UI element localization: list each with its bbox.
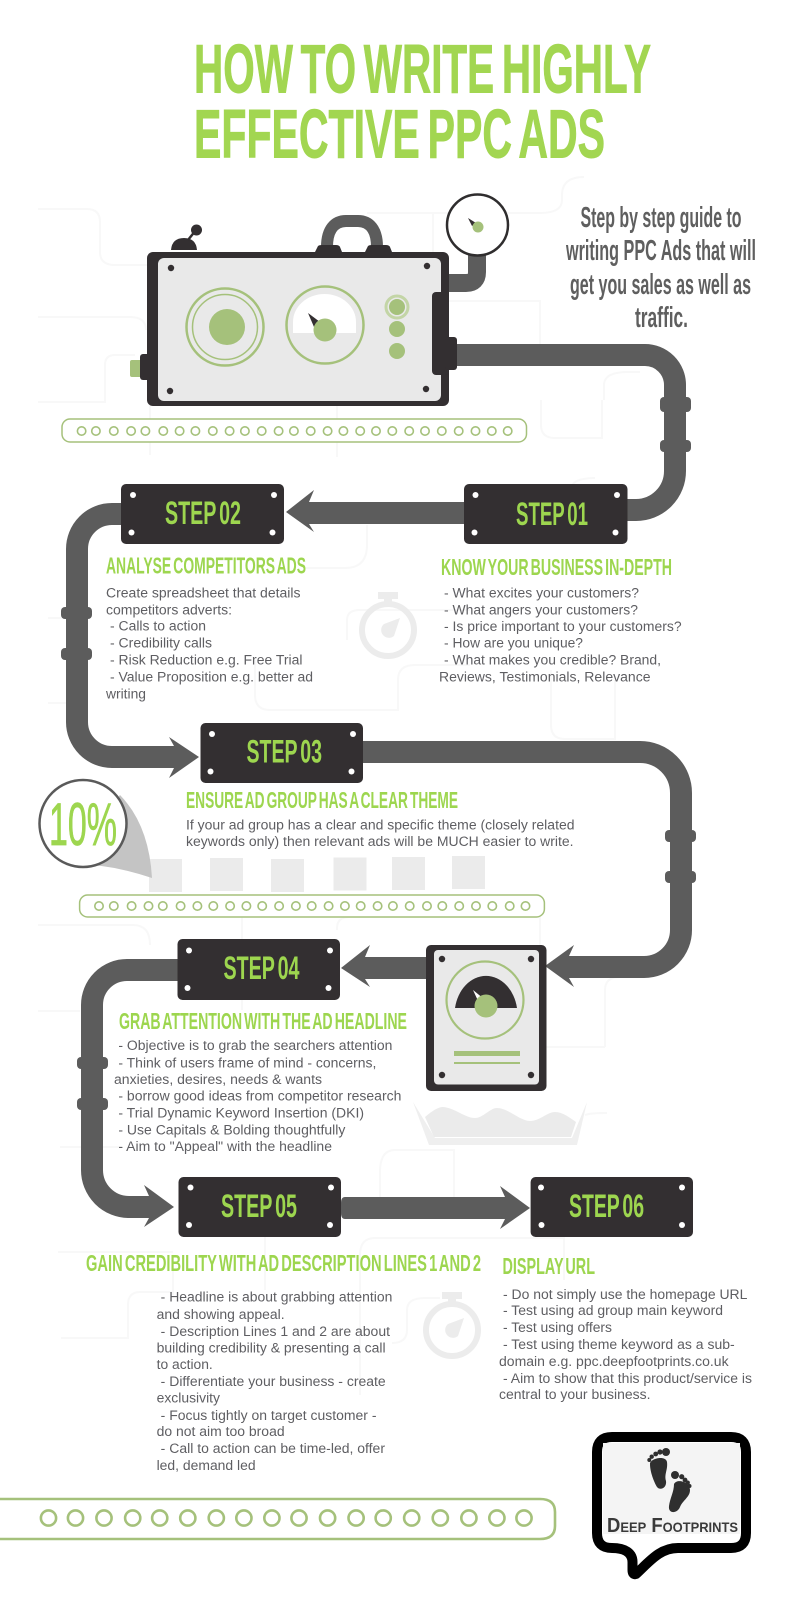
side knob [130,360,142,377]
step 02 text [105,585,313,701]
step 03 text: If your ad group has a clear and specific theme (closely related [186,818,574,832]
logo: Deep Footprints [597,1437,746,1574]
step 06 text [499,1287,752,1402]
indicator lights [386,296,408,359]
step 02 plate: STEP 02 [165,495,241,531]
step 01 text: - What excites your customers? [444,585,639,600]
step 03 plate [200,723,363,783]
step 05 text: - Description Lines 1 and 2 are about [161,1324,390,1339]
step 06 text: central to your business. [499,1387,650,1402]
step 05 text: led, demand led [157,1458,256,1473]
pipe: step 02 to step 03 [77,514,178,757]
pipe: step 03 to meter [363,752,681,967]
step 05 text: and showing appeal. [157,1307,285,1322]
step 05 plate [178,1177,341,1237]
title [194,30,651,172]
conveyor one [62,419,526,442]
step 03 plate: STEP 03 [246,734,322,770]
step 06 text: domain e.g. ppc.deepfootprints.co.uk [499,1354,729,1369]
icon: faint bowl [413,1102,587,1145]
step 02 text: - Value Proposition e.g. better ad [110,669,313,684]
step 06 plate: STEP 06 [569,1188,644,1224]
arrow: step 05 to step 06 [341,1186,530,1229]
arrow head and joints: step 03 entry [61,607,199,778]
step 05 text [157,1290,392,1473]
step 01 text: - What makes you credible? Brand, [444,652,661,667]
concentric dial [186,288,264,366]
meter panel [426,945,546,1091]
logo: Deep Footprints: Deep Footprints [607,1515,738,1537]
pipe: machine to step 01 [457,355,675,510]
step 04 text: - Objective is to grab the searchers attention [118,1038,392,1053]
machine illustration [130,194,508,406]
step 03 text: keywords only) then relevant ads will be MUCH easier to write. [186,834,574,849]
handle [315,221,392,252]
step 02 text: - Calls to action [110,619,206,634]
step 05 text: - Differentiate your business - create [161,1374,386,1389]
arrow: meter to step 04 [341,945,426,987]
10 percent callout [40,780,152,878]
conveyor three [0,1499,555,1539]
step 03 heading: ENSURE AD GROUP HAS A CLEAR THEME [186,787,458,813]
step 06 text: - Aim to show that this product/service is [503,1371,752,1386]
step 01 text: - Is price important to your customers? [444,619,682,634]
step 04 text: - Think of users frame of mind - concerns, [118,1055,376,1070]
step 03 text [186,818,574,849]
step 04 plate: STEP 04 [224,950,300,986]
panel screws [167,263,430,394]
step 06 text: - Do not simply use the homepage URL [503,1287,748,1302]
lever [171,224,202,250]
step 01 plate: STEP 01 [516,496,588,532]
step 01 text: Reviews, Testimonials, Relevance [439,669,650,684]
step 06 text: - Test using ad group main keyword [503,1303,723,1318]
10 percent callout: 10% [49,791,117,858]
subtitle text: traffic. [635,302,688,334]
step 04 plate [178,939,340,1000]
step 05 plate: STEP 05 [221,1188,297,1224]
arrow: step 01 to step 02 [286,490,464,532]
arrow head and joints: meter entry [545,830,696,987]
step 04 text: anxieties, desires, needs & wants [114,1072,322,1087]
step 01 text [439,585,682,684]
step 05 text: to action. [157,1357,213,1372]
step 05 text: - Headline is about grabbing attention [161,1290,392,1305]
step 06 heading: DISPLAY URL [502,1253,595,1279]
step 05 text: - Focus tightly on target customer - [161,1408,376,1423]
step 04 text: - borrow good ideas from competitor research [118,1089,401,1104]
step 06 plate [531,1177,693,1237]
step 05 text: - Call to action can be time-led, offer [161,1441,386,1456]
step 05 text: do not aim too broad [157,1424,285,1439]
step 04 text: - Trial Dynamic Keyword Insertion (DKI) [118,1105,364,1120]
step 02 text: Create spreadsheet that details [106,585,301,600]
step 06 text: - Test using offers [503,1320,612,1335]
icon: stopwatch two [426,1292,478,1356]
step 04 heading: GRAB ATTENTION WITH THE AD HEADLINE [119,1008,407,1034]
machine body [147,252,449,406]
pipe joints: step 01 pipe [660,397,691,452]
step 01 text: - What angers your customers? [444,602,638,617]
step 04 text: - Aim to "Appeal" with the headline [118,1139,332,1154]
step 04 text [114,1038,401,1154]
gauge pipe [449,250,477,283]
icon: stopwatch one [362,592,414,656]
icon: footprints [647,1448,692,1512]
arrow head and joints: step 05 entry [77,1057,174,1227]
step 01 text: - How are you unique? [444,635,583,650]
half gauge [286,286,364,364]
conveyor two [80,895,544,917]
step 06 text: - Test using theme keyword as a sub- [503,1337,735,1352]
step 02 text: - Credibility calls [110,635,212,650]
step 02 text: - Risk Reduction e.g. Free Trial [110,652,302,667]
step 02 text: competitors adverts: [106,602,232,617]
step 02 text: writing [105,686,146,701]
step 05 text: exclusivity [157,1391,220,1406]
step 05 heading: GAIN CREDIBILITY WITH AD DESCRIPTION LINES 1 AND 2 [86,1250,481,1276]
subtitle text [565,202,756,334]
step 01 plate [464,484,628,544]
step 04 text: - Use Capitals & Bolding thoughtfully [118,1122,346,1137]
step 02 plate [121,484,284,544]
top gauge [447,194,508,256]
step 05 text: building credibility & presenting a call [157,1340,386,1355]
pipe: step 04 to step 05 [92,970,178,1207]
step 02 heading: ANALYSE COMPETITORS ADS [106,552,306,578]
grey squares row [149,856,485,892]
